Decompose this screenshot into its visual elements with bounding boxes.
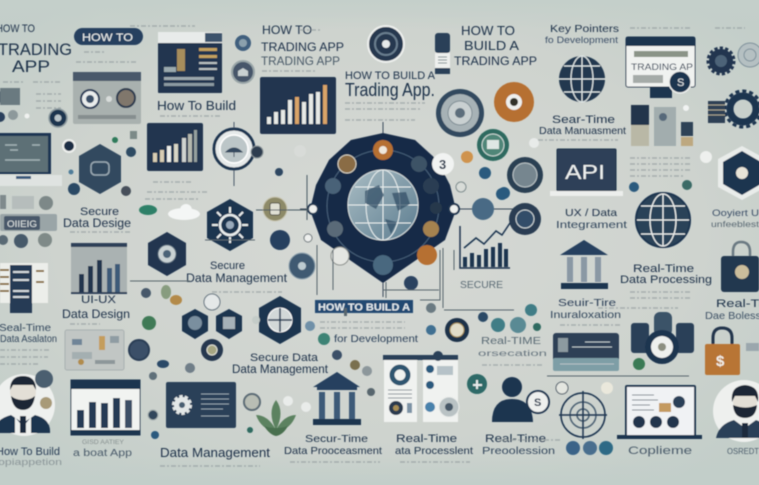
label: secure: SECURE — [460, 280, 503, 291]
hexagon compass — [259, 296, 301, 344]
green circle — [477, 129, 509, 161]
cloud icon — [139, 204, 200, 220]
headings: real-time processlent: Real-Time — [396, 433, 457, 445]
orange padlock — [705, 328, 759, 375]
heading: right edge: Ooyiert U — [712, 208, 759, 218]
heading: ui-ux data design — [62, 294, 130, 321]
heading: how to trading app centre: TRADING APP — [261, 54, 340, 68]
heading: secure data design: Data Desige — [63, 218, 131, 230]
heading: key pointers: fo Development — [545, 35, 619, 45]
banner: how to build a — [315, 300, 413, 314]
person silhouette with badge — [467, 374, 549, 422]
temple right — [560, 240, 608, 289]
heading: how to build a trading app right — [454, 23, 537, 68]
data sheet left — [0, 263, 48, 313]
heading: how to trading app centre: HOW TO — [262, 23, 312, 37]
heading: ux data integrament — [556, 207, 627, 231]
heading: how to build a trading app — [345, 70, 436, 100]
browser: trading app — [626, 37, 695, 98]
heading: real-ti right edge — [705, 298, 759, 322]
tag bar left: OIIEIG — [7, 219, 37, 230]
heading: how to build a trading app right: HOW TO — [461, 23, 515, 38]
heading: how to trading app left: APP — [12, 57, 50, 76]
dials right column — [498, 138, 712, 235]
heading: for development: for Development — [334, 333, 418, 345]
heading: how to trading app centre — [261, 23, 344, 68]
heading: real-time data processing right: Real-Time — [633, 263, 694, 275]
spiral dial — [436, 89, 484, 137]
temple left — [313, 372, 361, 425]
heading: sear-time data management: Data Manuasment — [539, 126, 626, 137]
heading: secure data management — [186, 260, 288, 285]
heading: ux data integrament: UX / Data — [565, 207, 617, 219]
hexagon right — [718, 146, 759, 200]
heading: data management bottom: Data Management — [160, 445, 270, 460]
headings: real-time preoolession: Preoolession — [482, 445, 555, 457]
clock dial — [214, 122, 254, 186]
browser: trading app: TRADING AP — [631, 62, 693, 73]
headings: secur-time data processment — [284, 433, 382, 457]
heading: sear-time data management: Sear-Time — [552, 114, 615, 126]
heading: ui-ux data design: UI-UX — [81, 294, 117, 306]
heading: real-time: orsecation — [478, 348, 547, 358]
heading: ux data integrament: Integrament — [556, 219, 627, 231]
report document — [383, 351, 459, 422]
security shields cluster — [631, 312, 694, 370]
bar chart centre — [260, 77, 336, 134]
small panels cluster — [631, 105, 693, 146]
heading: how to build a trading app: Trading App. — [345, 80, 435, 100]
central network wheel with globe — [300, 122, 514, 297]
orange padlock: $ — [716, 353, 725, 370]
heading: secure data design — [63, 206, 131, 230]
circle dial top — [368, 26, 404, 62]
hexagon secure data — [79, 144, 121, 194]
orange circle — [494, 82, 534, 122]
small icons left cluster — [0, 88, 137, 196]
long divider — [130, 240, 689, 376]
heading: secure data management: Data Management — [186, 273, 288, 285]
heading: secure data management lower — [232, 352, 329, 376]
headings: real-time processlent: ata Processlent — [395, 445, 473, 457]
heading: how to trading app left — [0, 23, 72, 76]
heading: how to trading app centre: TRADING APP — [261, 40, 344, 54]
heading: ui-ux data design: Data Design — [62, 307, 130, 321]
headings: real-time processlent — [395, 433, 473, 457]
headings: secur-time data processment: Data Prooceasment — [284, 445, 382, 457]
heading: real-ti right edge: Dae Boless — [705, 311, 759, 322]
navy padlock — [721, 242, 759, 292]
heading: secure data management: Secure — [210, 260, 245, 272]
three round icons — [556, 382, 613, 455]
browser bar chart — [71, 380, 140, 435]
laptop: API — [550, 149, 623, 196]
bar chart UI-UX — [71, 243, 127, 294]
heading: seal-time data asalaton — [0, 323, 57, 345]
heading: real-time: Real-TIME — [481, 336, 541, 347]
grey table card — [65, 330, 124, 370]
person silhouette with badge: S — [534, 397, 541, 409]
globe icon top right — [559, 56, 605, 102]
target crosshair — [559, 391, 607, 439]
heading: seal-time data asalaton: Data Asalaton — [0, 334, 57, 345]
heading: real-time data processing right: Data Processing — [620, 274, 712, 286]
hexagon trio — [129, 285, 260, 439]
browser: trading app: S — [677, 77, 684, 89]
heading: real-time — [478, 336, 547, 358]
headings: real-time preoolession: Real-Time — [485, 433, 546, 445]
gear hexagon — [207, 199, 253, 251]
person right — [713, 380, 759, 442]
satellite icons around wheel — [251, 145, 508, 335]
connector lines — [317, 245, 514, 310]
number badge 3 — [432, 153, 454, 175]
chart: secure — [460, 223, 510, 268]
heading: seuir-tire: Inuraloxation — [550, 309, 621, 321]
heading: seuir-tire: Seuir-Tire — [558, 297, 616, 309]
heading: how to build: How To Build — [157, 98, 236, 113]
laptop compliance — [617, 386, 702, 439]
pill: how to: HOW TO — [82, 32, 133, 44]
dashboard screen top — [158, 32, 222, 93]
person left — [0, 370, 55, 436]
banner: how to build a: HOW TO BUILD A — [318, 302, 410, 314]
pill: how to — [74, 28, 143, 45]
document icon — [435, 33, 450, 74]
heading: right edge: unfeeblest — [711, 219, 759, 229]
headings: secur-time data processment: Secur-Time — [305, 433, 368, 445]
heading: boat app: GISD AATIEY — [82, 439, 125, 446]
credit card panel — [553, 333, 619, 371]
heading: secure data design: Secure — [80, 206, 119, 218]
gears top right — [708, 43, 759, 127]
heading: boat app — [73, 439, 133, 459]
leaf — [256, 400, 296, 436]
heading: how to build a trading app right: TRADING APP — [454, 54, 537, 68]
hexagon dark lower — [148, 232, 186, 276]
heading: seuir-tire — [550, 297, 621, 321]
heading: how to build a trading app right: BUILD A — [464, 38, 519, 53]
heading: how to build bottom left — [0, 446, 62, 467]
heading: key pointers: Key Pointers — [550, 23, 619, 35]
number badge 3: 3 — [439, 157, 446, 172]
heading: sear-time data management — [539, 114, 626, 137]
laptop: API: API — [565, 162, 605, 184]
headings: real-time preoolession — [482, 433, 555, 457]
dial with gold ring — [445, 304, 541, 342]
data panel with gear — [166, 382, 236, 428]
small icons centre lower — [252, 308, 375, 412]
heading: real-ti right edge: Real-Ti — [716, 298, 759, 310]
globe icon large — [636, 193, 690, 247]
grey dashboard panel — [73, 72, 141, 124]
heading: copliemce: Coplieme — [628, 445, 692, 457]
heading: boat app: a boat App — [73, 448, 133, 459]
heading: seal-time data asalaton: Seal-Time — [0, 323, 51, 334]
heading: how to build a trading app: HOW TO BUILD A — [345, 70, 436, 82]
laptop left — [0, 133, 62, 186]
heading: how to trading app left: TRADING — [0, 40, 72, 59]
small icons top — [232, 35, 254, 83]
heading: real-time data processing right — [620, 263, 712, 286]
heading: secure data management lower: Secure Data — [250, 352, 319, 364]
heading: secure data management lower: Data Management — [232, 364, 329, 376]
heading: right edge — [711, 208, 759, 229]
bar chart dark left — [147, 123, 203, 171]
tag bar left — [0, 195, 57, 248]
heading: key pointers — [545, 23, 619, 45]
